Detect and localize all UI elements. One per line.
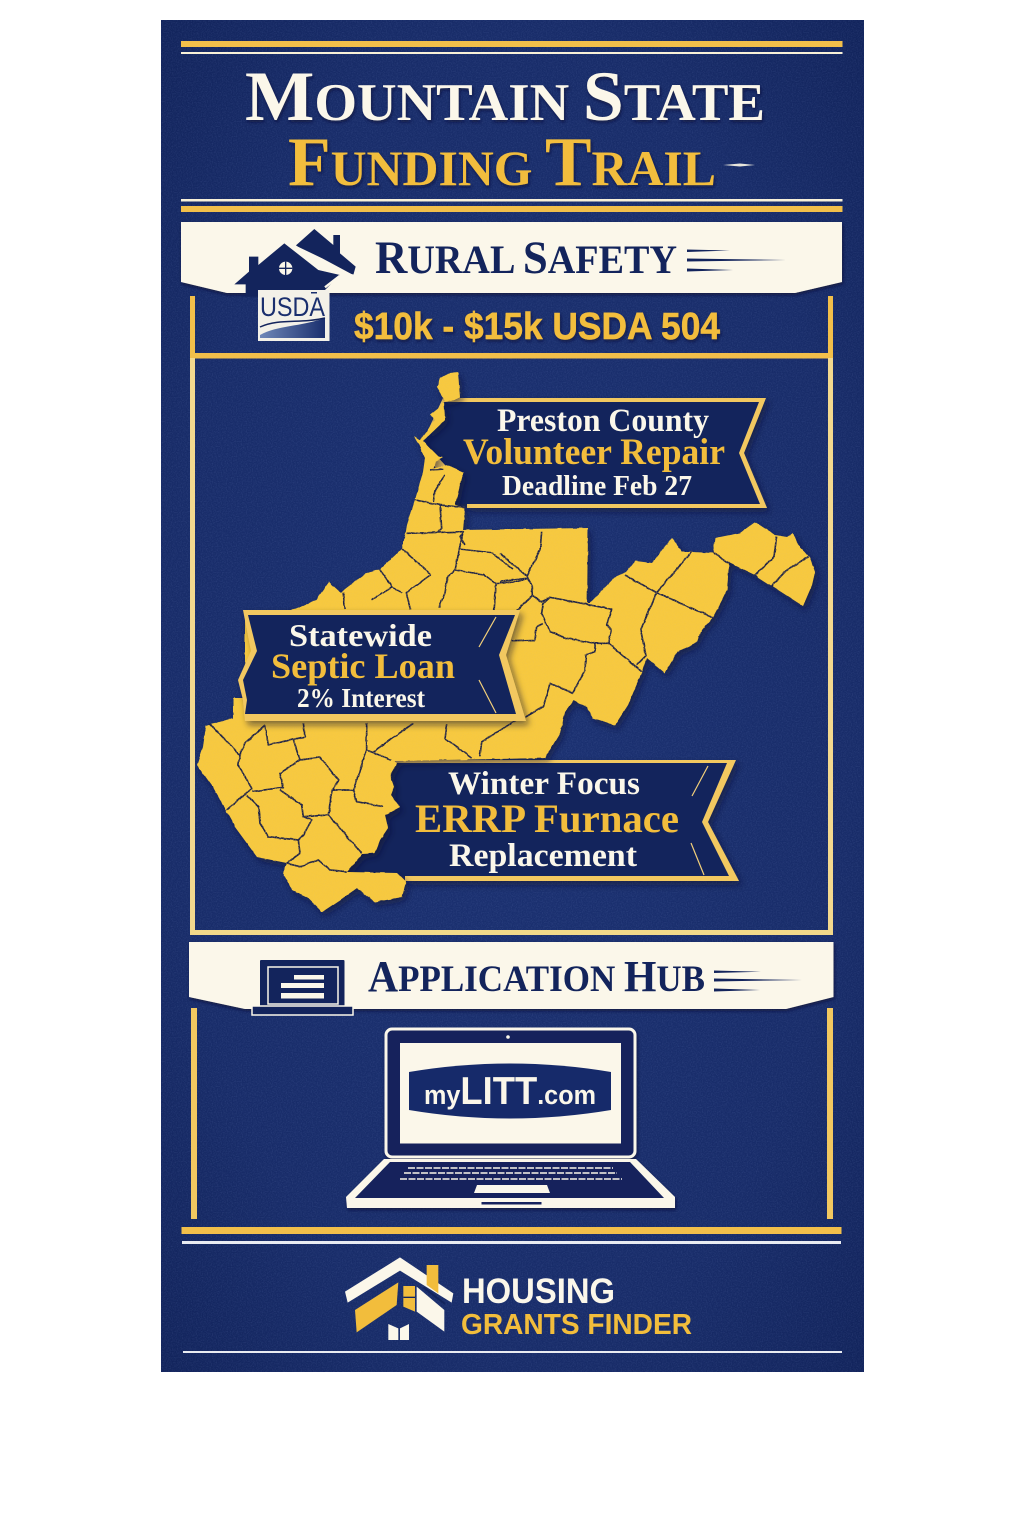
text: Preston County callout: Volunteer Repair: [463, 432, 725, 473]
text: Preston County callout: Preston County: [497, 403, 709, 439]
callout shape: Preston County: [423, 398, 767, 508]
icon: roof separator: [293, 245, 353, 287]
map section bottom rule: [190, 930, 833, 935]
laptop: base: [346, 1159, 675, 1208]
footer rules: [182, 1227, 842, 1244]
logo: wordmark bottom: GRANTS FINDER: [461, 1309, 692, 1341]
icon: left house: [234, 243, 340, 297]
header rules top: [181, 41, 842, 54]
map: county lines: [210, 469, 808, 872]
callout: Statewide: Statewide: [289, 617, 432, 653]
panel: navy poster background: [161, 20, 864, 1372]
title swoosh: [723, 164, 755, 166]
icon: small laptop: [252, 960, 353, 1015]
laptop: website pill: myLITT.com: [424, 1070, 596, 1113]
speed lines: application hub: [714, 970, 802, 992]
text: Winter Focus callout: Replacement: [449, 838, 637, 874]
title line 2: FUNDING TRAIL: [288, 124, 716, 201]
laptop: website pill: [409, 1064, 611, 1118]
map: main state shape: [197, 372, 729, 912]
icon: houses with USDA sign: [234, 229, 356, 341]
text: Winter Focus callout: [415, 766, 679, 874]
callout: Statewide: Septic Loan: [271, 646, 455, 686]
panel: application hub frame: [191, 1008, 833, 1219]
title line 1: MOUNTAIN STATE: [245, 58, 765, 136]
icon: window: [279, 262, 292, 275]
title: [245, 58, 765, 201]
laptop: screen: [386, 1029, 635, 1157]
laptop illustration: [346, 1029, 675, 1208]
text: Preston County callout: Deadline Feb 27: [502, 471, 692, 502]
text: Winter Focus callout: Winter Focus: [448, 766, 640, 802]
subheading: USDA 504 amount: $10k - $15k USDA 504: [354, 306, 720, 348]
laptop: trackpad: [474, 1185, 550, 1193]
map: West Virginia counties: [197, 372, 815, 912]
icon: USDA sign: USDA: [260, 292, 325, 322]
heading: application hub: APPLICATION HUB: [368, 952, 705, 1001]
callout shape: Winter Focus: [340, 760, 739, 881]
text: Winter Focus callout: ERRP Furnace: [415, 796, 679, 841]
logo: Housing Grants Finder: [345, 1257, 692, 1341]
laptop: keyboard: [400, 1168, 622, 1179]
banner: rural safety: [181, 222, 842, 293]
heading: rural safety: RURAL SAFETY: [375, 232, 677, 284]
text: Preston County callout: [463, 403, 725, 502]
footer rule: [183, 1351, 842, 1353]
banner: application hub: [189, 942, 834, 1009]
icon: right house: [296, 229, 356, 275]
logo: wordmark top: HOUSING: [462, 1272, 615, 1311]
header rules bottom: [181, 199, 842, 212]
speed lines: rural safety: [687, 250, 786, 272]
map: eastern panhandle: [713, 522, 815, 606]
callout: Statewide: 2% Interest: [297, 683, 425, 713]
logo: house mark: [345, 1257, 453, 1340]
callout: Statewide: [238, 610, 526, 721]
panel: rural safety frame: [190, 296, 833, 934]
